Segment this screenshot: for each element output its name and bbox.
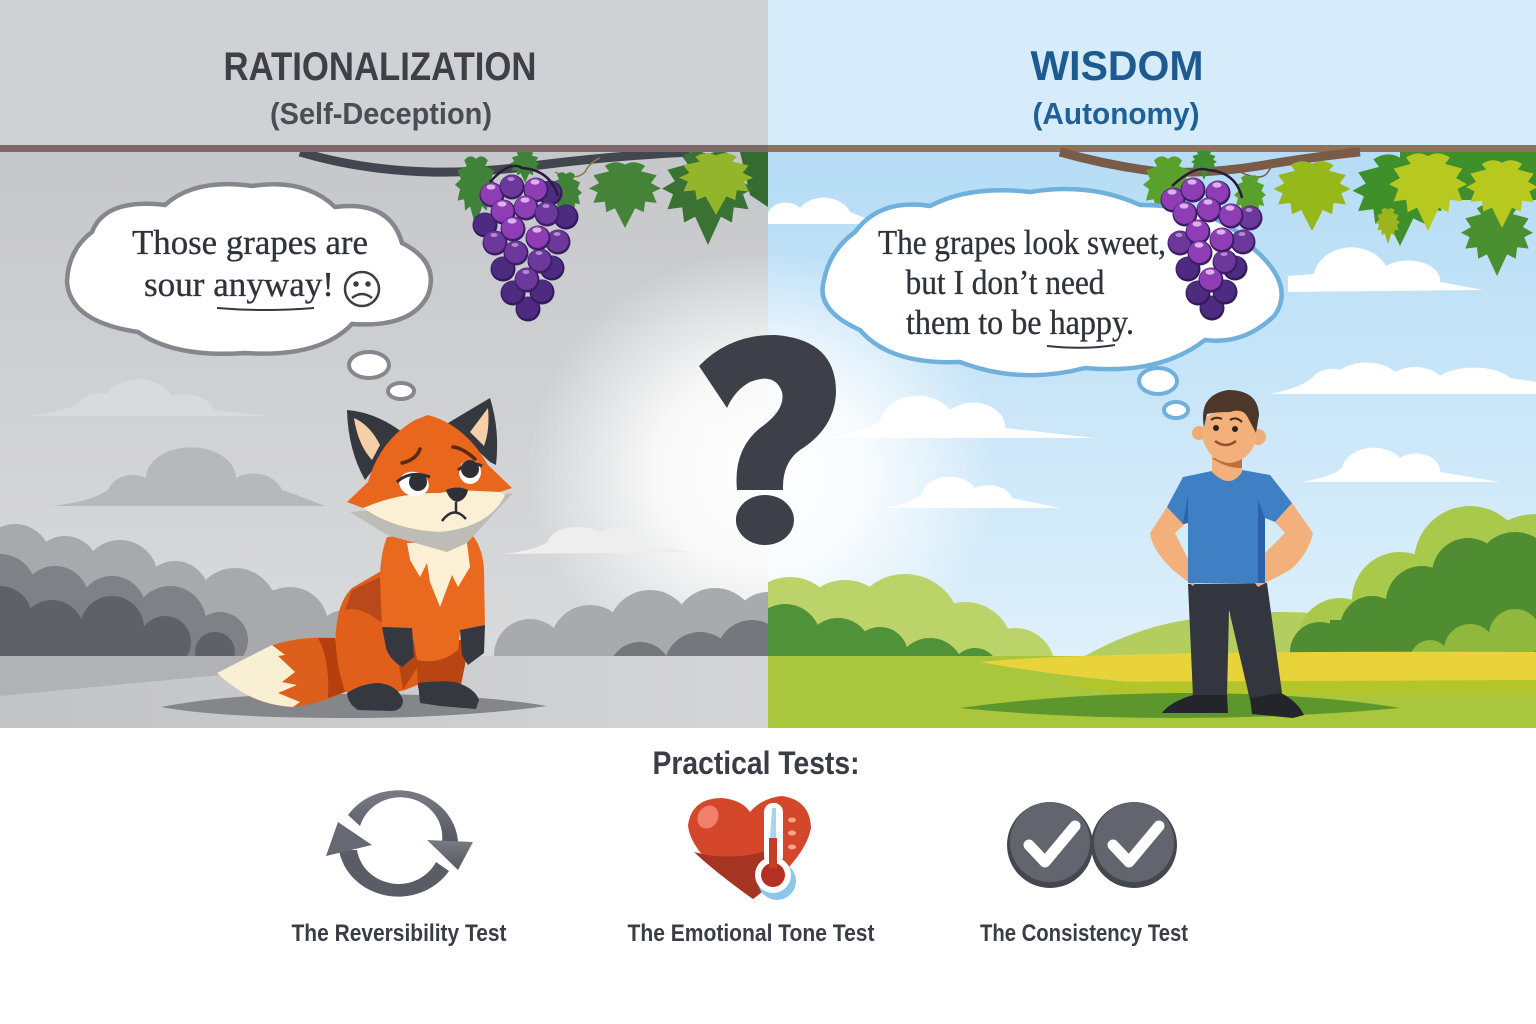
thought bubble: right (822, 189, 1282, 418)
header: left band (0, 0, 768, 146)
head (347, 415, 512, 532)
title: wisdom: WISDOM (1030, 42, 1204, 89)
ears and head (1192, 426, 1206, 440)
fox (217, 398, 513, 711)
bubble text: Those grapes are (132, 223, 368, 262)
thought bubble: right: them to be happy. (906, 303, 1134, 342)
panel: wisdom scene (742, 198, 1536, 728)
pants (1188, 583, 1282, 700)
thought bubble: left: sour anyway! (144, 265, 334, 304)
nose and mouth (446, 488, 468, 502)
hills: green right (1085, 506, 1536, 656)
header: right band (768, 0, 1536, 146)
question mark (699, 335, 836, 545)
shirt (1167, 470, 1292, 583)
thought bubble: right: but I don’t need (906, 263, 1105, 302)
vine: right branch and leaves (1060, 150, 1536, 276)
eyes (396, 469, 432, 499)
arms (1150, 507, 1202, 586)
label: emotional tone: The Emotional Tone Test (628, 920, 874, 947)
label: reversibility: The Reversibility Test (292, 920, 506, 947)
sky: right (768, 150, 1536, 728)
muzzle (363, 490, 505, 532)
hills: green left (768, 574, 1054, 656)
bubble text: The grapes look sweet, (878, 223, 1166, 262)
icon: double check marks (1007, 802, 1177, 888)
meadow (768, 652, 1536, 728)
hind legs (395, 640, 470, 690)
bar: vine rail (0, 145, 1536, 152)
chest and front legs (380, 530, 485, 661)
icon: reversibility arrows (326, 790, 473, 897)
heading: practical tests: Practical Tests: (652, 745, 860, 781)
title: rationalization: RATIONALIZATION (224, 45, 536, 89)
rear body and thigh (336, 560, 430, 695)
grapes: right bunch (1160, 169, 1262, 320)
vine: left branch and leaves (300, 151, 768, 245)
brows (402, 449, 420, 463)
clouds: grey sky (34, 380, 612, 554)
sky: left (0, 150, 768, 728)
hills: dark grey left (0, 524, 340, 656)
collar shadow (350, 493, 513, 552)
grapes: left bunch (472, 166, 578, 322)
clouds: bright sky (768, 198, 1536, 508)
panel: rationalization scene (0, 379, 804, 728)
icon: sad face (345, 272, 379, 306)
hills: grey right of fox (494, 588, 768, 656)
center glow (527, 250, 997, 690)
icon: heart with thermometer (688, 796, 811, 900)
ground (0, 656, 768, 728)
thought bubble: left (67, 184, 431, 399)
subtitle: autonomy: (Autonomy) (1032, 96, 1200, 131)
shoes (1162, 693, 1304, 718)
neck (1212, 452, 1242, 481)
ears (347, 410, 402, 480)
chest fur (407, 543, 470, 607)
man (1150, 390, 1313, 718)
tail (217, 638, 345, 707)
label: consistency: The Consistency Test (980, 920, 1188, 947)
subtitle: self-deception: (Self-Deception) (270, 96, 492, 131)
paws (382, 627, 414, 667)
